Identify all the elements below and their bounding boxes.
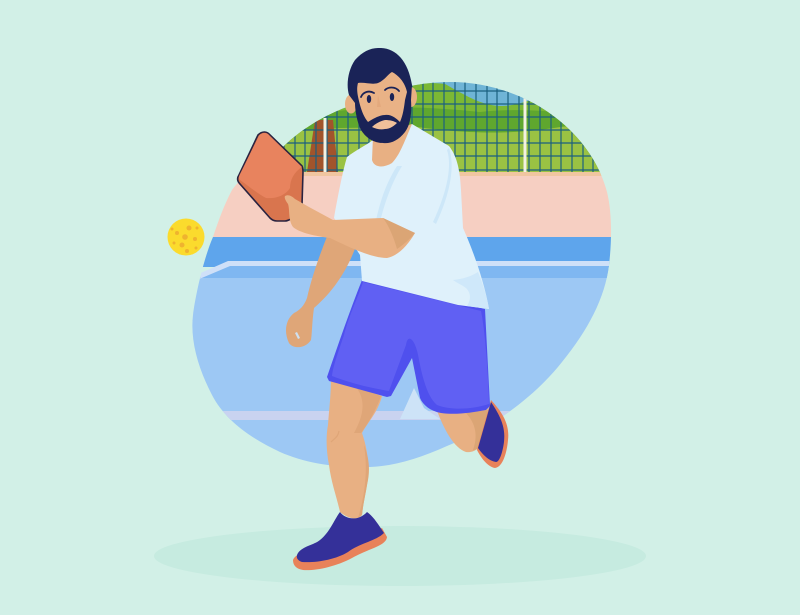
- knee crease: [331, 431, 339, 442]
- court surface: [192, 266, 609, 467]
- eyebrows: [361, 88, 399, 97]
- dark court band: [180, 237, 620, 267]
- front shoe upper: [297, 512, 384, 562]
- tree trunk: [307, 120, 338, 172]
- nose: [377, 95, 381, 107]
- calf shade: [358, 445, 369, 518]
- mouth area: [372, 120, 397, 129]
- back arm: [286, 234, 356, 347]
- wall top edge: [304, 172, 602, 176]
- right eye: [390, 93, 394, 101]
- back wall: [180, 172, 620, 238]
- pale court marking behind knee: [400, 388, 440, 419]
- pickleball: [168, 218, 204, 256]
- shorts highlight: [332, 282, 489, 409]
- player: [238, 48, 508, 570]
- court far strip: [200, 266, 620, 278]
- left ear: [345, 94, 357, 114]
- hair and beard: [348, 48, 412, 143]
- shirt hem shade: [453, 272, 489, 309]
- mid hill band: [284, 108, 600, 172]
- ball holes: [170, 226, 198, 253]
- paddle face highlight: [239, 133, 302, 198]
- back leg: [436, 408, 488, 452]
- net posts: [324, 96, 526, 172]
- court lower line: [223, 411, 510, 420]
- court scene blob: [180, 80, 620, 480]
- shirt sleeve fold: [433, 148, 452, 224]
- paddle: [238, 132, 303, 221]
- right ear: [405, 87, 417, 107]
- elbow shade: [383, 218, 415, 249]
- illustration: pickleball player: [154, 48, 646, 586]
- t-shirt: [334, 124, 489, 309]
- shorts: [327, 280, 490, 414]
- left eye: [367, 95, 371, 103]
- neck: [372, 124, 412, 166]
- sky: [320, 82, 558, 120]
- back hand detail: [295, 332, 300, 339]
- back hills: [284, 83, 601, 174]
- front arm: [285, 195, 415, 258]
- ground shadow: [154, 526, 646, 586]
- court white line: [196, 261, 612, 280]
- net grid: [284, 82, 600, 172]
- foreground grass: [284, 126, 601, 174]
- front shoe sole: [293, 528, 387, 570]
- front leg: [327, 378, 382, 518]
- back shoe sole: [477, 400, 508, 468]
- thigh shade: [354, 387, 381, 433]
- back shoe upper: [478, 402, 504, 462]
- shirt chest fold: [376, 166, 402, 220]
- back leg shade: [466, 410, 488, 450]
- face: [357, 72, 407, 122]
